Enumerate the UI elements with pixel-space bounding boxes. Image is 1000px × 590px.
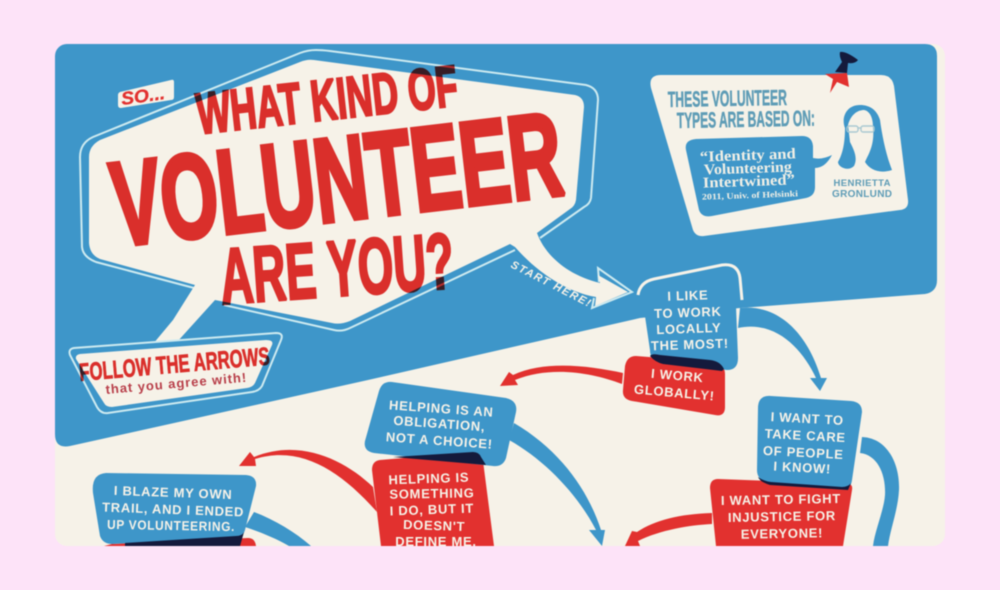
box: i work globally: GLOBALLY! xyxy=(633,382,715,404)
citation: Volunteering xyxy=(704,159,793,179)
title: VOLUNTEER xyxy=(105,88,569,272)
banner text xyxy=(78,346,270,395)
arrow: red, something i do xyxy=(239,450,377,512)
label: start here: START HERE! xyxy=(509,259,593,310)
box: helping is an obligation: OBLIGATION, xyxy=(393,413,486,434)
box: helping is an obligation xyxy=(365,382,516,466)
title xyxy=(105,54,569,321)
box: fight injustice: INJUSTICE FOR xyxy=(728,508,836,525)
infographic xyxy=(54,43,945,547)
box: helping is something: SOMETHING xyxy=(389,485,475,502)
arrow: blue, obligation xyxy=(509,423,605,546)
citation: “Identity and xyxy=(700,146,797,166)
arrow: blue, care onward xyxy=(860,437,899,546)
box: take care of people: OF PEOPLE xyxy=(763,443,844,462)
box: red, cut off below blaze xyxy=(104,538,256,546)
name: HENRIETTA xyxy=(834,178,891,189)
title: ARE YOU? xyxy=(217,216,457,321)
banner text: FOLLOW THE ARROWS xyxy=(78,342,271,387)
icon: henrietta portrait xyxy=(838,105,892,172)
box: i like to work locally: I LIKE xyxy=(667,287,709,304)
card heading: THESE VOLUNTEER xyxy=(668,85,787,112)
card speech bubble xyxy=(686,136,832,216)
box: i like to work locally: THE MOST! xyxy=(651,336,729,353)
name xyxy=(832,178,892,200)
box: i work globally: I WORK xyxy=(651,366,704,385)
speech bubble: outline xyxy=(80,50,632,331)
icon: push pin xyxy=(825,52,858,93)
box: i like to work locally xyxy=(638,265,742,371)
box: fight injustice: I WANT TO FIGHT xyxy=(721,491,841,508)
box: i like to work locally: LOCALLY xyxy=(656,320,722,337)
box: take care of people: I WANT TO xyxy=(770,409,844,428)
citation: 2011, Univ. of Helsinki xyxy=(702,188,799,202)
box: helping is something: HELPING IS xyxy=(388,470,469,487)
box: i like to work locally: TO WORK xyxy=(654,304,722,321)
box: i blaze my own trail: UP VOLUNTEERING. xyxy=(107,517,235,534)
banner text: that you agree with! xyxy=(105,370,247,397)
arrow: blue, local to care xyxy=(738,308,827,391)
arrow: red, global xyxy=(500,366,623,386)
box: fight injustice xyxy=(710,479,852,546)
box: take care of people xyxy=(757,396,862,490)
banner: follow the arrows xyxy=(70,333,282,413)
card: source xyxy=(650,75,908,236)
title: WHAT KIND OF xyxy=(193,54,461,147)
box: i blaze my own trail: I BLAZE MY OWN xyxy=(114,483,233,502)
speech bubble: fill with tail xyxy=(89,60,628,344)
box: helping is something: I DO, BUT IT xyxy=(389,501,474,518)
card heading: TYPES ARE BASED ON: xyxy=(677,106,815,133)
tag: so xyxy=(118,80,174,109)
tag: so: SO... xyxy=(120,83,166,109)
box: i work globally xyxy=(623,356,725,415)
box: helping is an obligation: NOT A CHOICE! xyxy=(385,429,493,452)
panel: poster xyxy=(55,44,945,549)
arrow: blue, blaze xyxy=(245,512,311,546)
box: take care of people: TAKE CARE xyxy=(764,426,846,445)
box: take care of people: I KNOW! xyxy=(773,459,831,477)
box: helping is something: DOESN'T xyxy=(403,517,465,534)
box: helping is something xyxy=(372,452,494,549)
arrow: red, injustice xyxy=(625,513,712,546)
name: GRONLUND xyxy=(832,189,892,200)
box: fight injustice: EVERYONE! xyxy=(741,525,823,542)
box: helping is an obligation: HELPING IS AN xyxy=(389,397,494,420)
panel: blue header background xyxy=(55,44,937,446)
box: i blaze my own trail: TRAIL, AND I ENDED xyxy=(102,500,244,519)
box: helping is something: DEFINE ME. xyxy=(395,534,477,549)
card heading xyxy=(667,88,815,129)
citation xyxy=(700,146,799,202)
box: i blaze my own trail xyxy=(93,473,256,546)
citation: Intertwined” xyxy=(703,172,795,192)
